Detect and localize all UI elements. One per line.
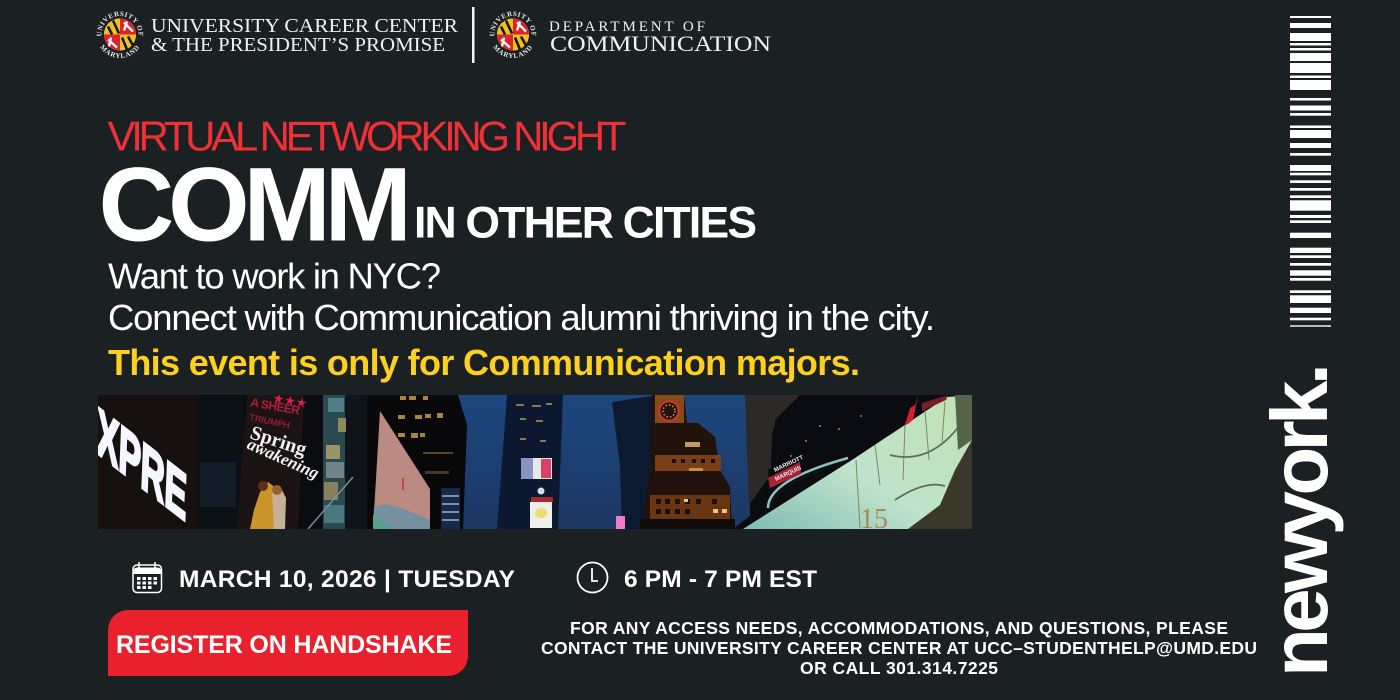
heading: Department of Communication [549, 19, 771, 56]
small lit facade [441, 488, 460, 529]
large mural billboard [743, 395, 972, 535]
Spring Awakening poster: A SHEER [249, 395, 301, 418]
vertical label: new york.: newyork. [1255, 363, 1344, 677]
contact note: OR CALL 301.314.7225 [800, 658, 998, 678]
icon: University of Maryland seal: UNIVERSITY OF [96, 12, 144, 36]
date text: MARCH 10, 2026 | TUESDAY [179, 566, 515, 593]
Marriott building [771, 415, 862, 468]
button: Register on Handshake [108, 610, 468, 676]
title: In Other Cities: IN OTHER CITIES [414, 198, 757, 248]
intro text [108, 256, 935, 338]
eligibility note: This event is only for Communication majors. [108, 342, 860, 383]
contact note [541, 618, 1257, 678]
Marriott signs: MARRIOTT [773, 455, 805, 474]
heading: University Career Center and the President's Promise: UNIVERSITY CAREER CENTER [151, 15, 459, 37]
heading: University Career Center and the President's Promise: & THE PRESIDENT’S PROMISE [151, 34, 445, 56]
title: COMM: COMM [98, 146, 412, 264]
intro text: Connect with Communication alumni thriving in the city. [108, 297, 935, 338]
Spring Awakening poster: ★★★ [271, 390, 309, 411]
dark tower with lit windows [398, 395, 467, 529]
time row [578, 562, 817, 593]
button: Register on Handshake: REGISTER ON HANDSHAKE [116, 631, 452, 659]
heading: Department of Communication: DEPARTMENT OF [549, 19, 705, 35]
Spring Awakening poster [237, 390, 322, 529]
header logo: University Career Center [96, 12, 459, 58]
eyebrow: Virtual Networking Night: VIRTUAL NETWORKING NIGHT [108, 112, 626, 160]
heading: Department of Communication: COMMUNICATION [550, 31, 771, 56]
black band [735, 456, 792, 529]
icon: University of Maryland seal [490, 12, 536, 58]
Spring Awakening poster: awakening [244, 434, 322, 483]
icon: clock [578, 562, 608, 592]
teal building [308, 395, 354, 529]
header logo: Department of Communication [490, 12, 771, 58]
icon: University of Maryland seal: UNIVERSITY OF [490, 12, 536, 36]
icon: University of Maryland seal: MARYLAND [493, 44, 532, 58]
XPRESS sign: XPRE [95, 394, 188, 536]
contact note: FOR ANY ACCESS NEEDS, ACCOMMODATIONS, AND QUESTIONS, PLEASE [570, 618, 1228, 638]
title block [98, 112, 757, 264]
Spring Awakening poster: TRIUMPH [249, 412, 291, 430]
date row [133, 562, 515, 593]
large mural billboard: 15 [860, 504, 888, 535]
contact note: CONTACT THE UNIVERSITY CAREER CENTER AT UCC–STUDENTHELP@UMD.EDU [541, 638, 1257, 658]
time text: 6 PM - 7 PM EST [624, 566, 817, 593]
icon: University of Maryland seal [96, 12, 144, 58]
divider between logos [472, 7, 474, 63]
icon: calendar [133, 562, 162, 592]
heading: University Career Center and the President's Promise [151, 15, 459, 56]
Spring Awakening poster: Spring [247, 422, 309, 461]
photo: Times Square at dusk [95, 390, 972, 536]
clock tower [640, 395, 735, 529]
Marriott signs: MARQUIS [774, 465, 803, 483]
Marriott signs [768, 395, 948, 488]
left wall [98, 395, 198, 529]
sky [458, 395, 750, 529]
pink sign [616, 516, 625, 529]
intro text: Want to work in NYC? [108, 256, 441, 296]
grey facade [745, 395, 800, 505]
angled pink billboard [373, 411, 430, 529]
back tower [612, 396, 652, 529]
barcode [1290, 16, 1331, 327]
blue office tower with screens [497, 395, 563, 529]
icon: University of Maryland seal: MARYLAND [100, 44, 139, 58]
